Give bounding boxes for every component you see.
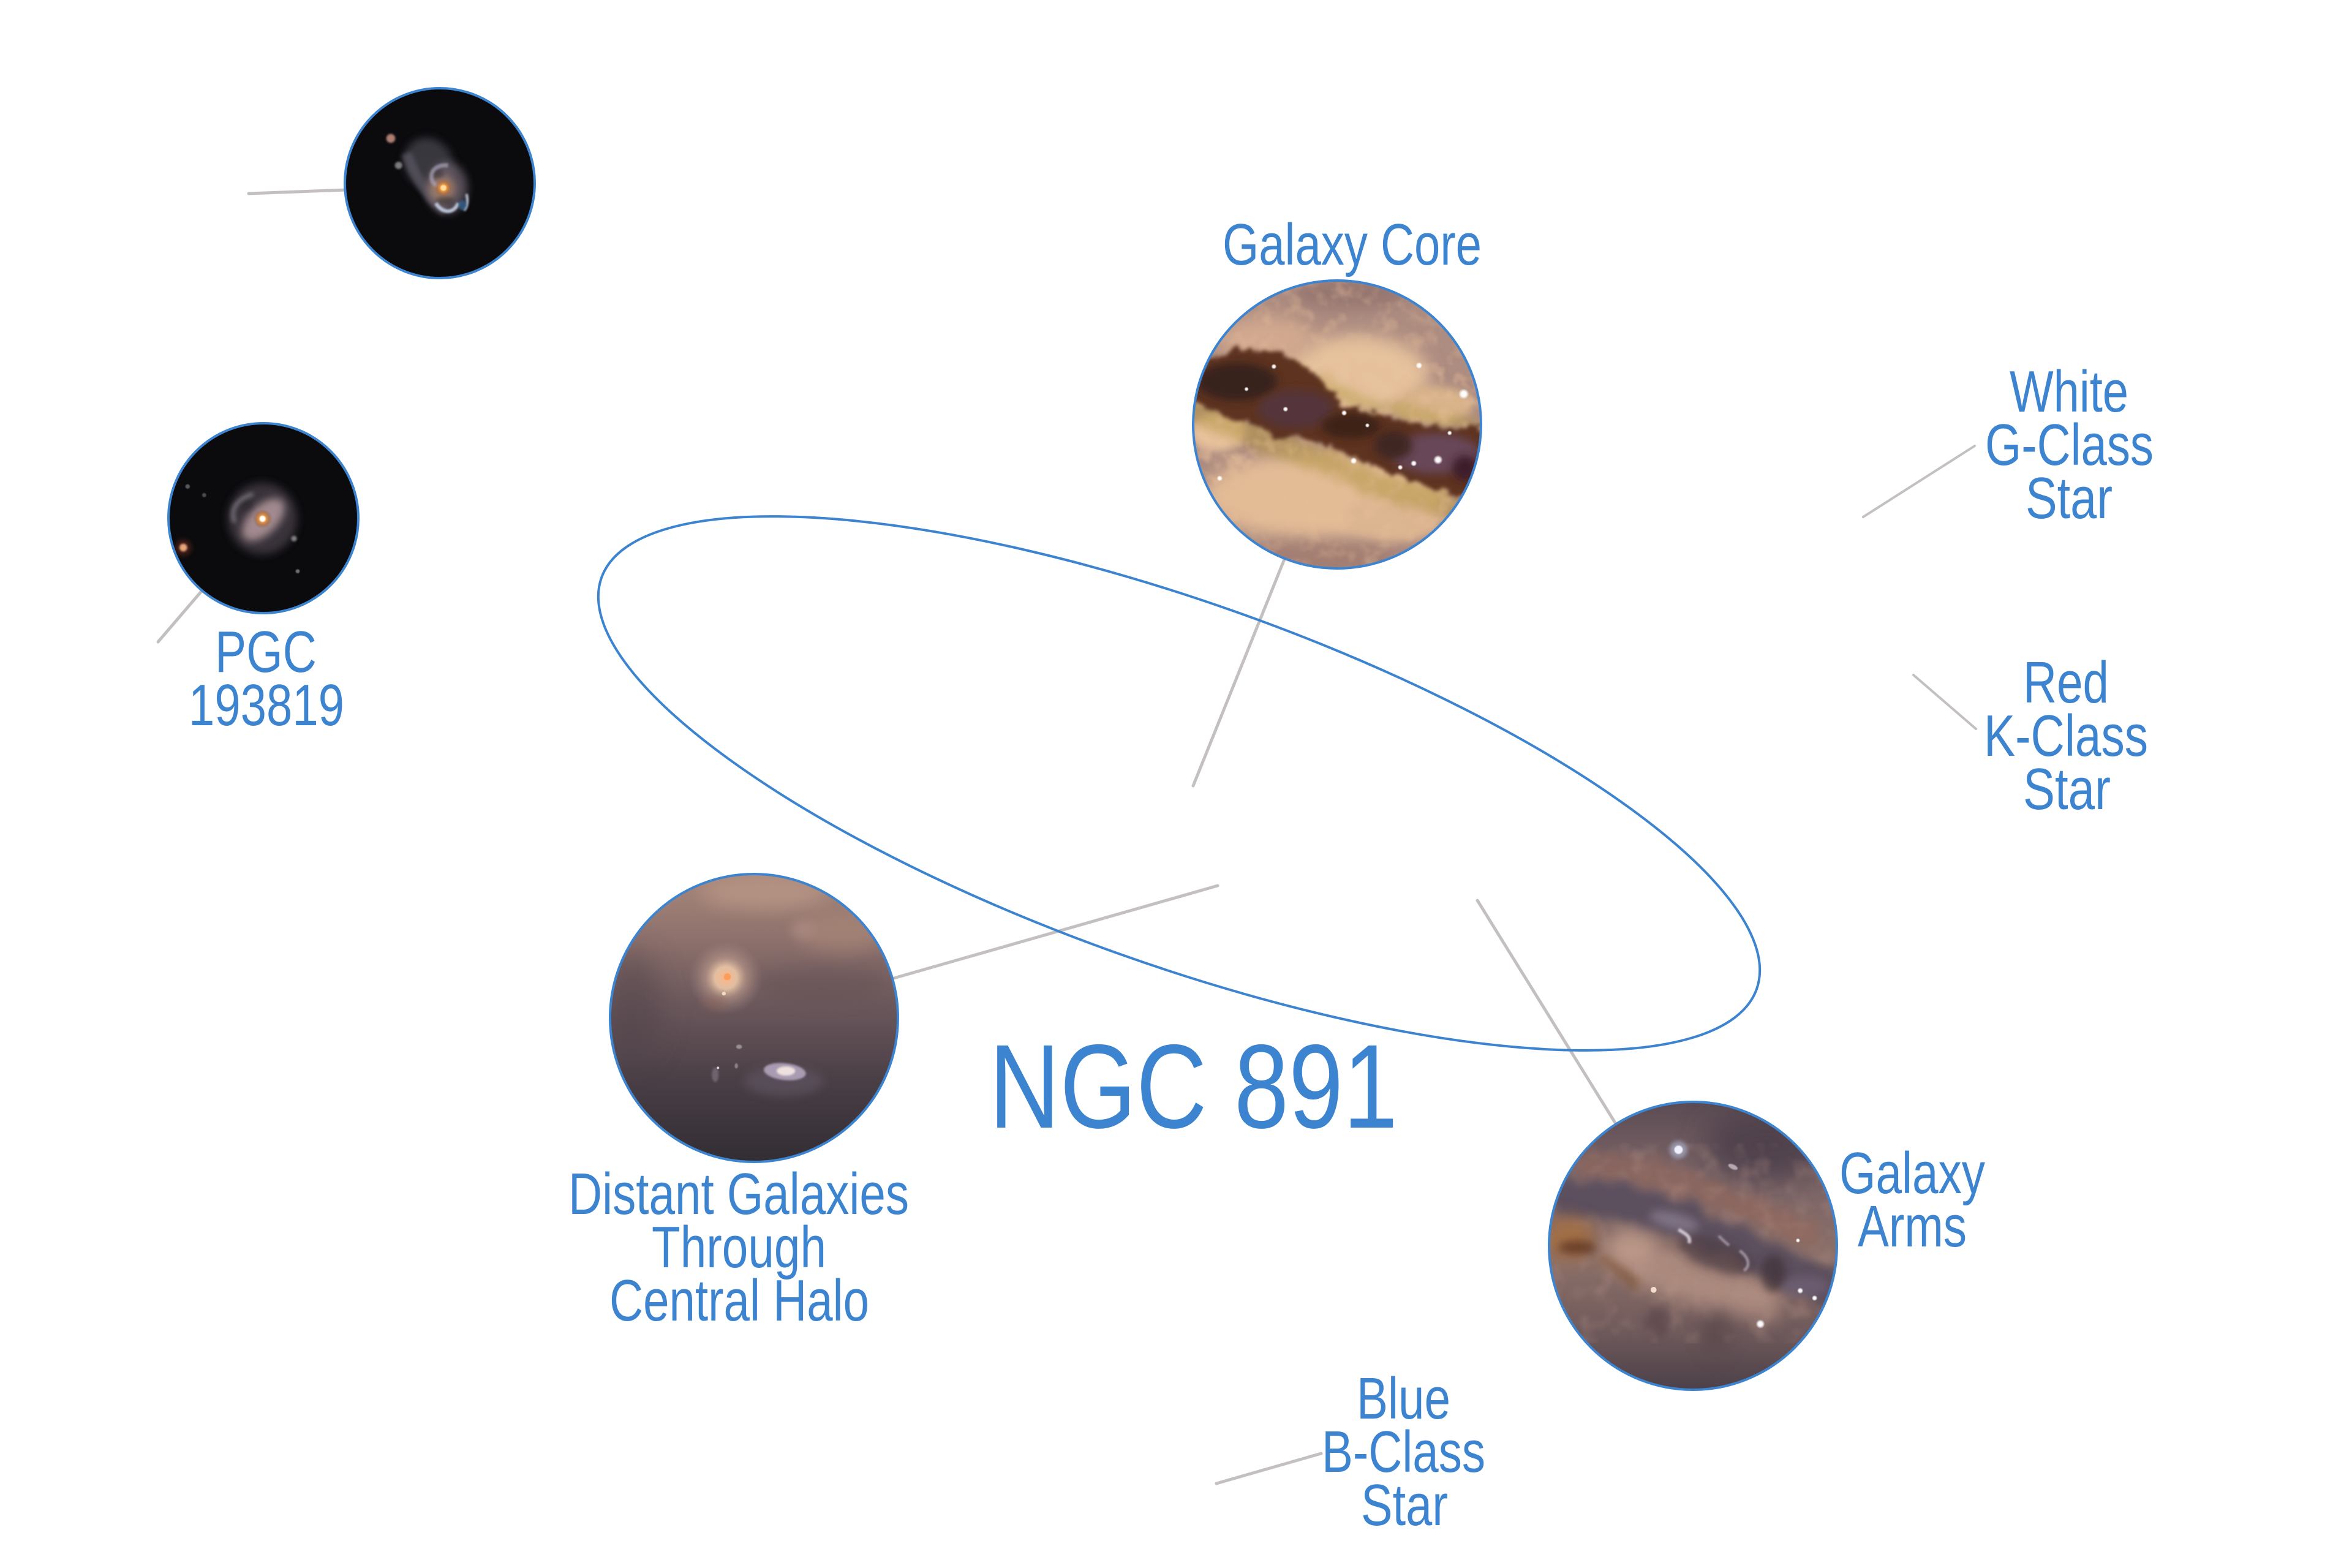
label: Distant Galaxies Through Central Halo: Through bbox=[652, 1215, 826, 1280]
leader line: upper companion galaxy bbox=[249, 190, 347, 194]
label: Galaxy Core: Galaxy Core bbox=[1223, 212, 1482, 277]
label: Distant Galaxies Through Central Halo: Distant Galaxies bbox=[568, 1161, 909, 1227]
inset: galaxy arms dust lane bbox=[1544, 1099, 1860, 1393]
inset: upper companion galaxy bbox=[343, 86, 539, 282]
label: White G-Class Star bbox=[1985, 359, 2154, 531]
leader line: galaxy core bbox=[1193, 556, 1286, 786]
leader line: distant galaxies bbox=[892, 886, 1218, 979]
label: Red K-Class Star: K-Class bbox=[1984, 703, 2148, 769]
leader line: galaxy arms bbox=[1477, 900, 1617, 1126]
label: PGC 193819: PGC bbox=[215, 619, 317, 685]
label: Galaxy Arms: Arms bbox=[1858, 1194, 1967, 1259]
inset: distant galaxies through central halo bbox=[602, 870, 907, 1170]
leader line: white G-class star bbox=[1863, 446, 1975, 517]
label: Distant Galaxies Through Central Halo bbox=[568, 1161, 909, 1333]
label: Red K-Class Star bbox=[1984, 650, 2148, 822]
label: Red K-Class Star: Red bbox=[2023, 650, 2109, 715]
inset: PGC 193819 galaxy bbox=[165, 420, 361, 616]
label: Red K-Class Star: Star bbox=[2023, 756, 2111, 822]
label: PGC 193819: 193819 bbox=[189, 673, 344, 738]
inset: galaxy core with dust lane bbox=[1182, 270, 1499, 580]
title: NGC 891 bbox=[989, 1020, 1398, 1153]
label: White G-Class Star: G-Class bbox=[1985, 412, 2154, 478]
leader line: blue B-class star bbox=[1216, 1453, 1321, 1483]
label: Distant Galaxies Through Central Halo: Central Halo bbox=[609, 1268, 869, 1333]
label: White G-Class Star: Star bbox=[2026, 466, 2113, 531]
infographic canvas bbox=[157, 87, 2152, 1526]
label: Galaxy Arms bbox=[1839, 1140, 1985, 1259]
label: Blue B-Class Star: B-Class bbox=[1322, 1419, 1485, 1485]
label: Galaxy Arms: Galaxy bbox=[1839, 1140, 1985, 1206]
label: Blue B-Class Star: Star bbox=[1361, 1472, 1448, 1538]
label: White G-Class Star: White bbox=[2010, 359, 2128, 424]
leader line: PGC 193819 bbox=[158, 590, 202, 642]
galaxy outline ellipse bbox=[541, 407, 1817, 1159]
label: Blue B-Class Star: Blue bbox=[1357, 1366, 1450, 1431]
label: Blue B-Class Star bbox=[1322, 1366, 1485, 1538]
label: PGC 193819 bbox=[189, 619, 344, 738]
leader line: red K-class star bbox=[1913, 675, 1976, 729]
